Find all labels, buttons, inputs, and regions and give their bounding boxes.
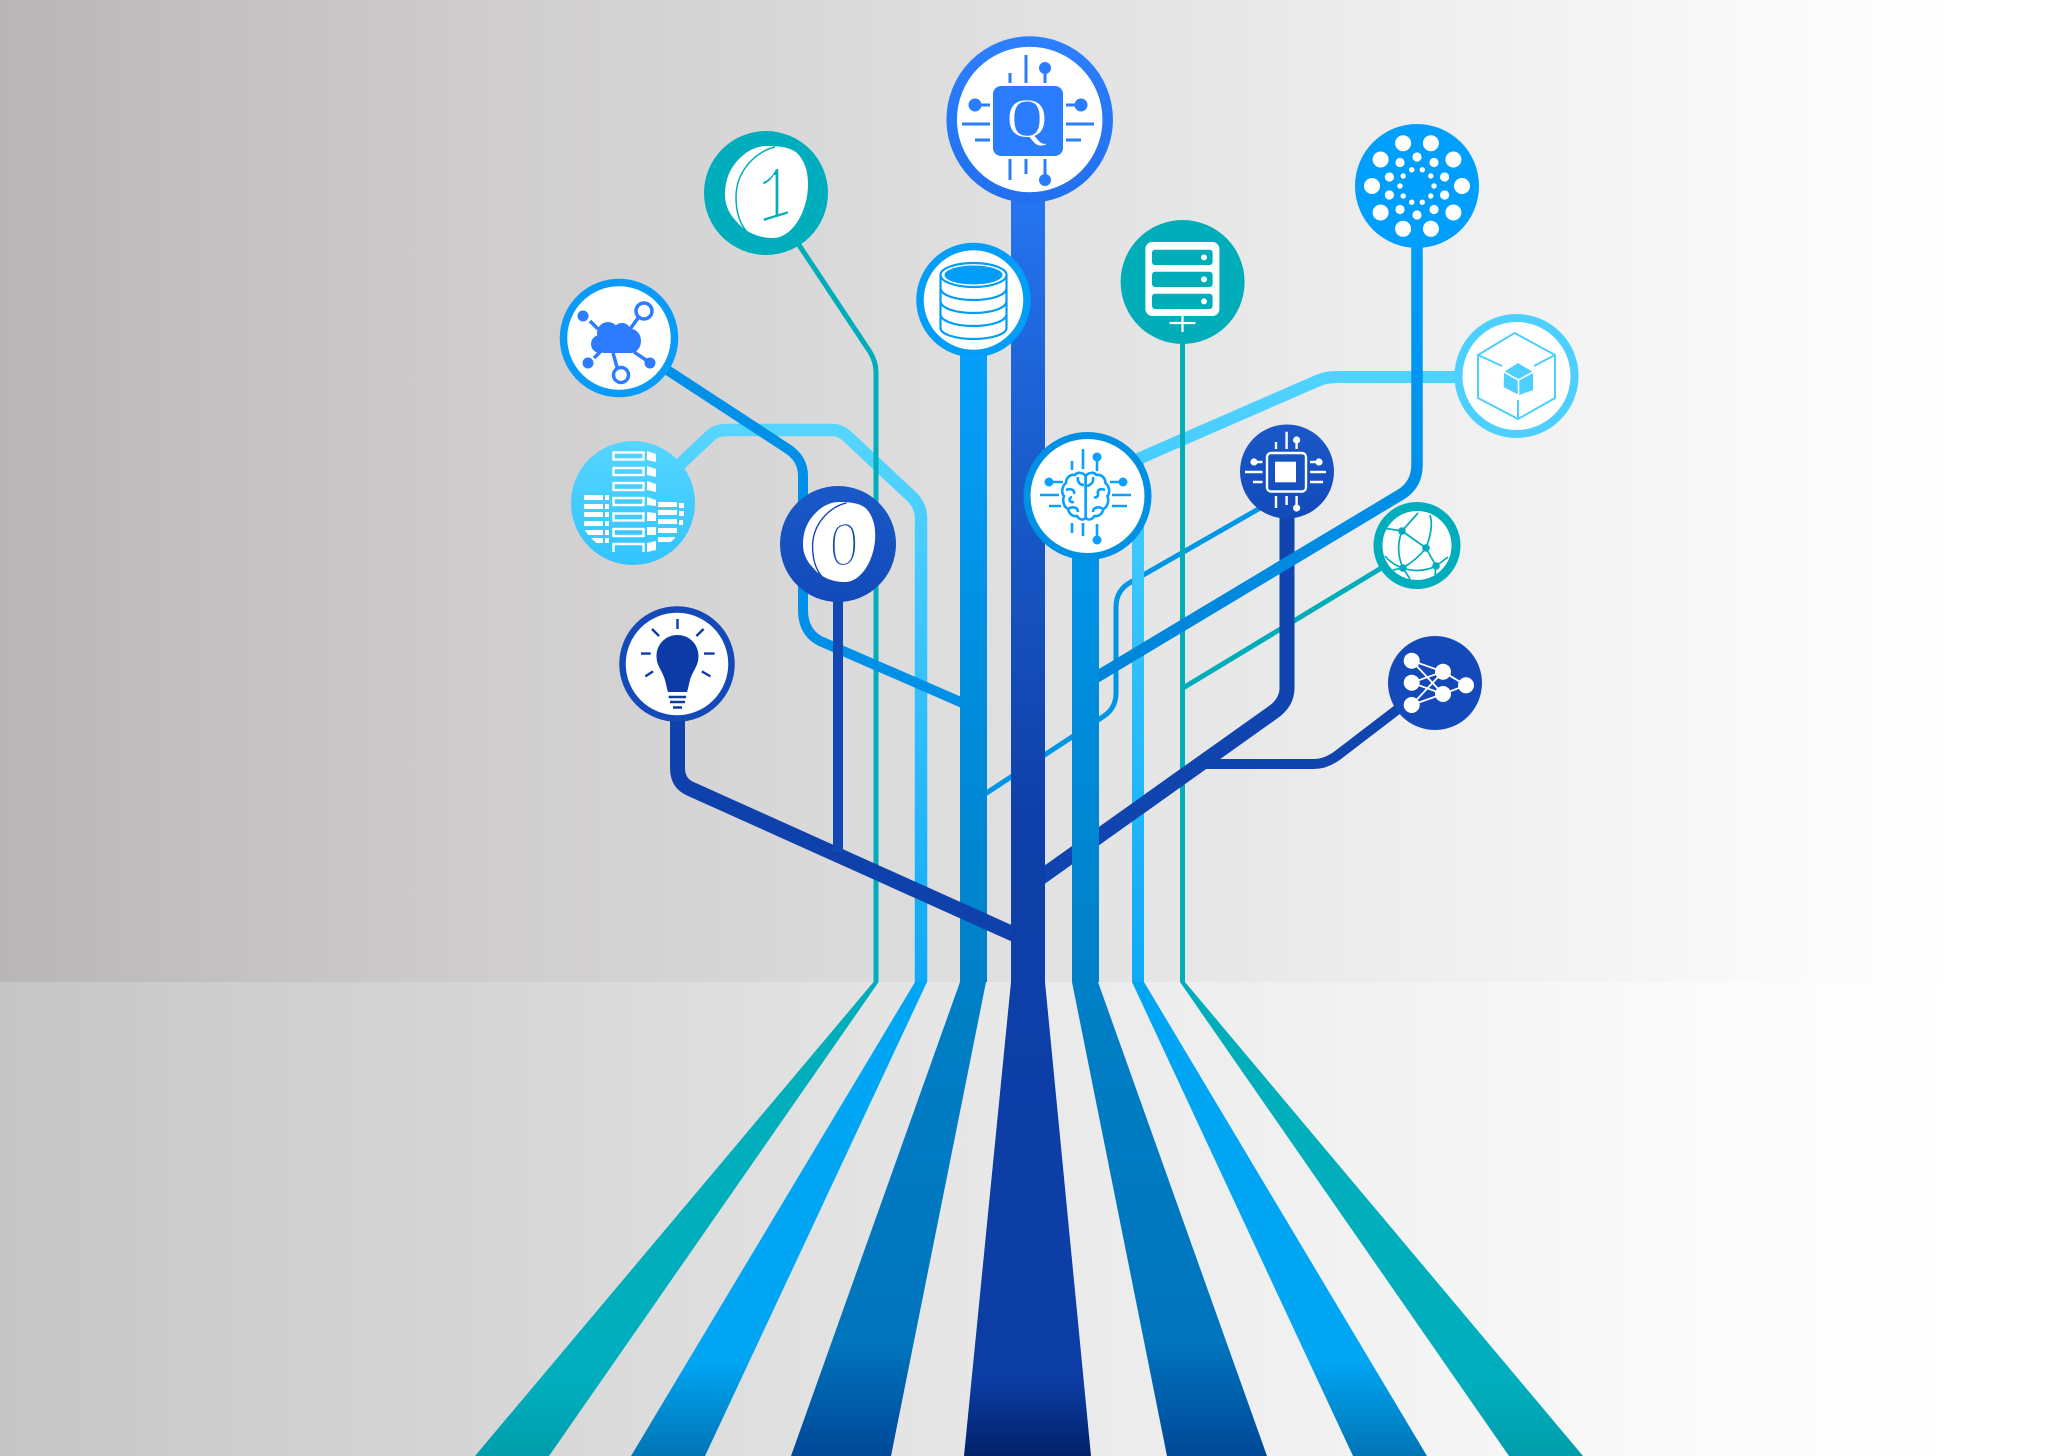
digit one: 1 (758, 151, 792, 248)
icon: neural network (1388, 636, 1482, 730)
trunk (1011, 150, 1045, 982)
circuit line: building to floor (675, 430, 921, 982)
icon: database (920, 246, 1027, 354)
background: lower floor (0, 982, 2059, 1456)
circuit line: chip to trunk thin (985, 507, 1262, 794)
stem: brain (1072, 540, 1099, 982)
background: upper wall (0, 0, 2059, 982)
circuit line: cloud to database stem (655, 362, 965, 704)
icon: light bulb (622, 610, 732, 718)
icon: dotted radial pattern (1355, 124, 1479, 248)
icon: coin with digit one (704, 131, 828, 255)
circuit line: coin one to floor (795, 239, 876, 982)
icon: server rack (1121, 220, 1245, 344)
circuit line: cube to floor (1138, 377, 1460, 982)
icon: coin with digit zero (780, 486, 896, 602)
circuit line: dots to brain stem (1090, 245, 1417, 681)
circuit line: globe (1183, 564, 1388, 688)
icon: microchip (1240, 424, 1334, 518)
icon: cloud network (564, 282, 674, 394)
icon: 3D cube (1458, 318, 1574, 434)
circuit line: bulb to trunk (678, 700, 1015, 935)
icon: brain circuit (1027, 436, 1148, 556)
perspective stripes on floor (475, 982, 1583, 1456)
stem: coin zero (833, 590, 843, 852)
icon: network globe (1378, 506, 1456, 584)
circuit line: chip to trunk thick (1040, 510, 1287, 878)
circuit line: neural network (1200, 706, 1402, 764)
stem: database (960, 350, 987, 982)
letter Q: Q (1007, 88, 1047, 150)
icon: quantum chip (952, 42, 1108, 198)
digit zero: 0 (829, 510, 859, 582)
icon: office buildings (571, 441, 695, 565)
circuit line: server to floor (1180, 340, 1185, 982)
